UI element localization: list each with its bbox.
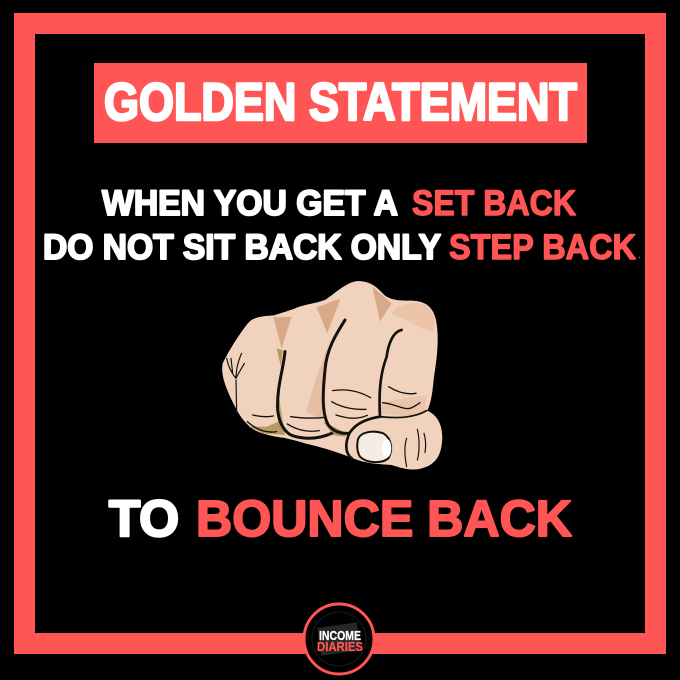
statement line 1: WHEN YOU GET A: [102, 184, 398, 223]
statement line 1: [102, 184, 576, 223]
title banner: GOLDEN STATEMENT: [104, 73, 577, 132]
closing line: TO: [109, 490, 179, 547]
logo badge: INCOME: [319, 629, 361, 643]
logo badge: DIARIES: [317, 639, 363, 654]
logo badge: [304, 604, 374, 674]
statement line 2: STEP BACK: [449, 228, 636, 267]
statement line 1: SET BACK: [412, 184, 576, 223]
thumbnail: [357, 432, 391, 462]
shadows between knuckles: [273, 287, 392, 348]
statement line 2: DO NOT SIT BACK ONLY: [43, 228, 441, 267]
closing line: BOUNCE BACK: [196, 490, 572, 547]
finger creases: [227, 320, 427, 467]
icon: clenched fist: [222, 281, 442, 470]
title banner: [94, 63, 587, 143]
statement line 2: [43, 228, 640, 267]
